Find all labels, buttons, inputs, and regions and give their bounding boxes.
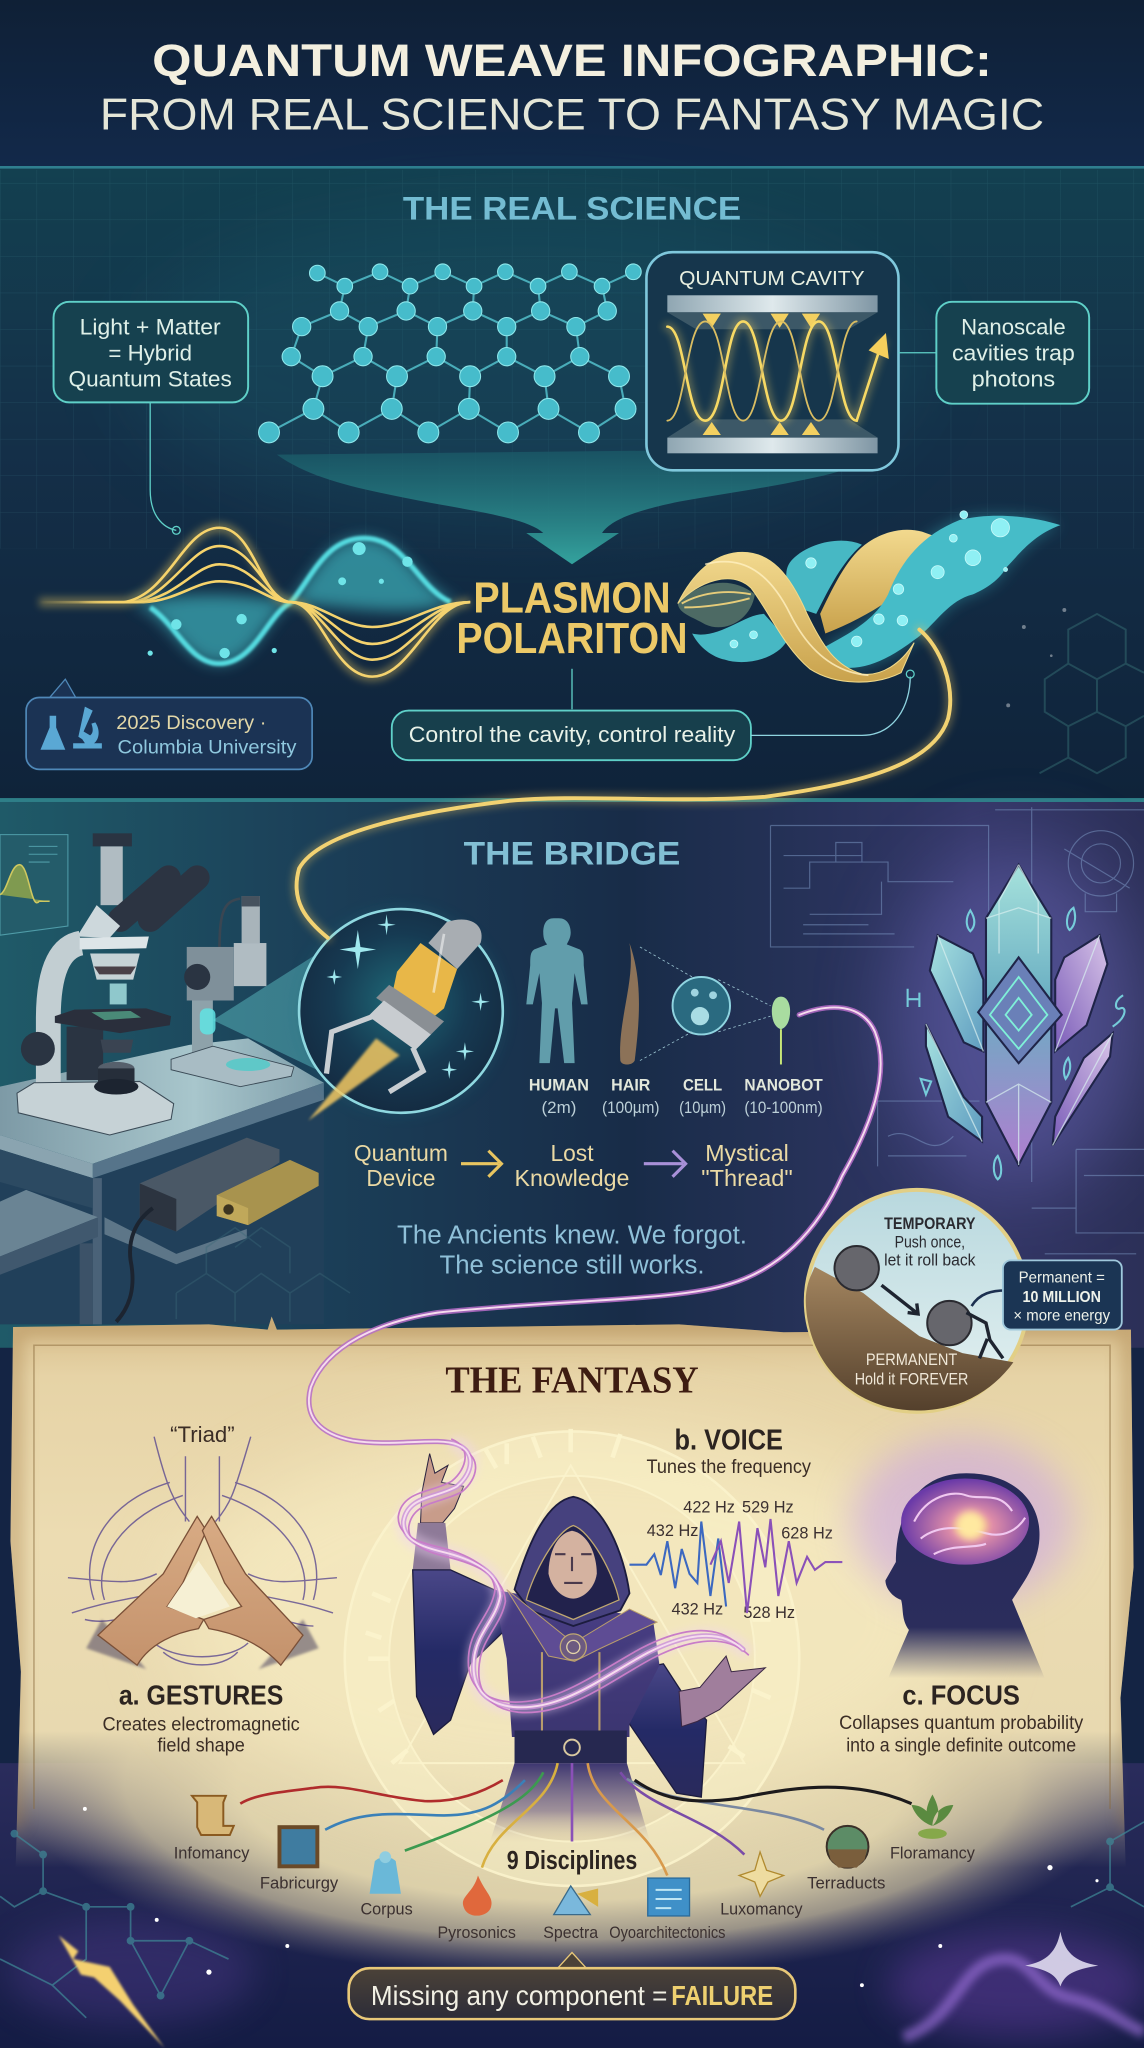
callout: light + matter xyxy=(54,302,248,534)
icon: floramancy xyxy=(890,1795,975,1862)
focus description xyxy=(839,1713,1084,1756)
icon: architecture blueprint xyxy=(609,1878,725,1942)
wave: light and matter combining xyxy=(39,528,470,677)
heading: 9 disciplines: 9 Disciplines xyxy=(507,1845,637,1875)
icon: corpus xyxy=(360,1851,413,1919)
gestures description: field shape xyxy=(157,1735,245,1756)
boulders xyxy=(834,1246,972,1345)
heading: the fantasy: THE FANTASY xyxy=(445,1359,699,1401)
inset text: permanent xyxy=(855,1351,969,1388)
panel: the real science background xyxy=(0,166,1144,799)
icon: architecture blueprint: Oyoarchitectonics xyxy=(609,1923,725,1942)
icon: pyrosonics: Pyrosonics xyxy=(437,1923,516,1942)
panel: wizard xyxy=(413,1454,765,1843)
callout: 2025 discovery xyxy=(26,679,312,769)
hands xyxy=(86,1516,319,1669)
icon: pyrosonics xyxy=(437,1875,516,1942)
cavity light waves xyxy=(667,321,888,421)
left sleeve xyxy=(413,1570,516,1734)
callout: 10 million more energy: × more energy xyxy=(1013,1307,1110,1324)
scale labels: HAIR xyxy=(611,1076,650,1095)
icon: corpus: Corpus xyxy=(360,1900,413,1919)
waveform xyxy=(629,1519,842,1613)
belt xyxy=(515,1731,627,1763)
tagline: The science still works. xyxy=(439,1249,705,1279)
push figure and arrow xyxy=(882,1285,1003,1358)
frequency labels: 529 Hz xyxy=(742,1498,794,1516)
twisted ribbon: hybrid state xyxy=(678,511,1060,682)
illustration: crystal cluster xyxy=(908,865,1125,1179)
panel: parchment fantasy background xyxy=(0,1317,1144,2048)
cavity label: QUANTUM CAVITY xyxy=(679,268,865,290)
focus label: c. FOCUS xyxy=(902,1679,1020,1710)
arrow: to lost knowledge xyxy=(461,1151,501,1177)
flow: device to thread: Device xyxy=(366,1165,436,1191)
heading: the real science: THE REAL SCIENCE xyxy=(403,190,741,227)
voice description: Tunes the frequency xyxy=(646,1457,811,1478)
voice label: b. VOICE xyxy=(675,1425,783,1457)
frequency labels: 528 Hz xyxy=(743,1604,795,1622)
belt buckle xyxy=(564,1740,580,1755)
icon: brain xyxy=(901,1478,1029,1565)
tagline xyxy=(397,1219,747,1279)
secondary scope and beam xyxy=(171,896,330,1087)
focus description: into a single definite outcome xyxy=(846,1735,1076,1756)
icon: terraducts: Terraducts xyxy=(807,1874,885,1893)
scale labels: (2m) xyxy=(542,1098,576,1117)
icon: spectra xyxy=(543,1886,599,1942)
callout: 2025 discovery: Columbia University xyxy=(118,737,297,759)
icon: fabricurgy xyxy=(260,1827,339,1893)
callout: control the cavity: Control the cavity, control reality xyxy=(409,722,736,747)
callout: nanoscale cavities: cavities trap xyxy=(952,341,1075,366)
scale labels: (100µm) xyxy=(602,1098,659,1117)
icon: spectra: Spectra xyxy=(543,1923,599,1942)
scale labels: (10-100nm) xyxy=(744,1098,823,1117)
heading: the bridge: THE BRIDGE xyxy=(464,835,680,872)
raised forearm xyxy=(413,1523,451,1570)
callout: 10 million more energy: Permanent = xyxy=(1019,1270,1105,1287)
icon: flask and microscope xyxy=(40,707,102,750)
flow: device to thread: "Thread" xyxy=(701,1165,793,1191)
frequency labels: 628 Hz xyxy=(781,1525,833,1543)
mantle and brooch xyxy=(507,1589,657,1661)
heading: plasmon polariton: PLASMON xyxy=(473,575,671,623)
facial features xyxy=(555,1554,592,1583)
frequency labels: 422 Hz xyxy=(683,1498,735,1516)
flow: device to thread: Knowledge xyxy=(515,1165,629,1191)
rune circle xyxy=(345,1429,799,1886)
tagline: The Ancients knew. We forgot. xyxy=(397,1219,747,1249)
icon: tiny nanobot xyxy=(772,997,790,1064)
icon: terraducts xyxy=(807,1826,885,1893)
face xyxy=(548,1531,597,1599)
cosmic effects lower corners xyxy=(0,1807,1144,2048)
scale comparison xyxy=(526,918,823,1117)
inset text: permanent: PERMANENT xyxy=(866,1351,957,1369)
icon: luxomancy xyxy=(720,1852,803,1919)
flow: device to thread xyxy=(354,1140,793,1191)
mystic thread xyxy=(309,1007,881,1713)
torso xyxy=(494,1589,659,1737)
callout: 2025 discovery: 2025 Discovery · xyxy=(116,712,266,734)
callout: missing any component xyxy=(349,1953,795,2019)
hood xyxy=(515,1497,629,1626)
chart panel upper left xyxy=(0,835,68,935)
callout: light + matter: = Hybrid xyxy=(108,341,192,366)
desk and legs xyxy=(0,1038,324,1324)
hood opening xyxy=(526,1525,619,1620)
inset: temporary vs permanent xyxy=(806,1190,1028,1412)
icon: nanobot magnified circle xyxy=(299,909,503,1121)
icon: hair xyxy=(620,943,639,1064)
icon: human xyxy=(526,918,588,1063)
gestures label: a. GESTURES xyxy=(119,1679,283,1710)
panel: voice xyxy=(629,1425,842,1622)
callout: missing any component: FAILURE xyxy=(671,1980,773,2011)
graphene lattice xyxy=(259,264,641,443)
inset text: temporary xyxy=(884,1215,976,1270)
icon: floramancy: Floramancy xyxy=(890,1843,975,1862)
callout: nanoscale cavities xyxy=(898,302,1089,404)
inset text: temporary: let it roll back xyxy=(884,1252,976,1270)
microscope xyxy=(17,833,197,1135)
panel: quantum cavity xyxy=(646,252,898,470)
cavity plates xyxy=(667,295,878,453)
brain glow xyxy=(851,1437,1073,1606)
scale labels: HUMAN xyxy=(529,1076,589,1095)
inset text: temporary: Push once, xyxy=(895,1233,965,1251)
faint molecule network bridge xyxy=(176,1228,350,1322)
nanobot body xyxy=(308,920,482,1121)
callout: light + matter: Quantum States xyxy=(69,367,232,392)
gestures description: Creates electromagnetic xyxy=(103,1715,300,1736)
header background xyxy=(0,0,1144,167)
scale labels: (10µm) xyxy=(679,1098,726,1117)
skirt xyxy=(490,1763,650,1843)
icon: infomancy: Infomancy xyxy=(174,1843,250,1862)
scale labels: CELL xyxy=(683,1076,722,1095)
flow: device to thread: Quantum xyxy=(354,1140,448,1166)
scale labels xyxy=(529,1076,823,1117)
callout: nanoscale cavities: Nanoscale xyxy=(961,314,1066,339)
title: FROM REAL SCIENCE TO FANTASY MAGIC xyxy=(100,90,1044,139)
icon: infomancy xyxy=(174,1796,250,1862)
funnel arrow into plasmon polariton xyxy=(277,451,838,564)
lower sleeve xyxy=(629,1664,707,1797)
flow: device to thread: Lost xyxy=(550,1140,594,1166)
discipline threads xyxy=(240,1763,912,1875)
flow: device to thread: Mystical xyxy=(705,1140,789,1166)
focus description: Collapses quantum probability xyxy=(839,1713,1084,1734)
title: QUANTUM WEAVE INFOGRAPHIC: xyxy=(152,35,992,86)
callout: missing any component: Missing any component = xyxy=(371,1980,667,2011)
illustration: lab desk with microscope xyxy=(0,833,330,1324)
icon: head silhouette xyxy=(885,1473,1045,1678)
callout: 10 million more energy: 10 MILLION xyxy=(1023,1289,1101,1306)
frequency labels: 432 Hz xyxy=(672,1600,723,1618)
callout: control the cavity xyxy=(392,669,914,760)
scale labels: NANOBOT xyxy=(744,1076,823,1095)
hill xyxy=(806,1267,1013,1411)
arrow: to mystical thread xyxy=(644,1151,686,1177)
panel: focus xyxy=(839,1437,1084,1756)
inset text: permanent: Hold it FOREVER xyxy=(855,1370,969,1388)
heading: plasmon polariton: POLARITON xyxy=(456,615,688,663)
icon: cell xyxy=(673,977,730,1034)
gestures description xyxy=(103,1715,300,1756)
panel: the bridge background xyxy=(0,798,1144,1348)
triad label: “Triad” xyxy=(170,1422,235,1447)
frequency labels xyxy=(647,1498,833,1622)
icon: fabricurgy: Fabricurgy xyxy=(260,1874,339,1893)
blueprint panels xyxy=(771,807,1144,1254)
inset text: temporary: TEMPORARY xyxy=(884,1215,976,1233)
title xyxy=(100,35,1044,139)
free arm cuff and hand xyxy=(679,1656,765,1727)
callout: nanoscale cavities: photons xyxy=(972,367,1055,392)
panel: gestures xyxy=(68,1422,337,1756)
field lines xyxy=(68,1437,337,1665)
heading: plasmon polariton xyxy=(456,575,688,663)
icon: luxomancy: Luxomancy xyxy=(720,1900,803,1919)
frequency labels: 432 Hz xyxy=(647,1522,698,1540)
laser power boxes xyxy=(116,1138,319,1322)
callout: 10 million more energy xyxy=(972,1260,1122,1330)
gold science thread xyxy=(297,630,950,938)
callout: light + matter: Light + Matter xyxy=(80,314,221,339)
faint molecule network right xyxy=(1006,608,1144,773)
raised hand xyxy=(421,1454,464,1523)
